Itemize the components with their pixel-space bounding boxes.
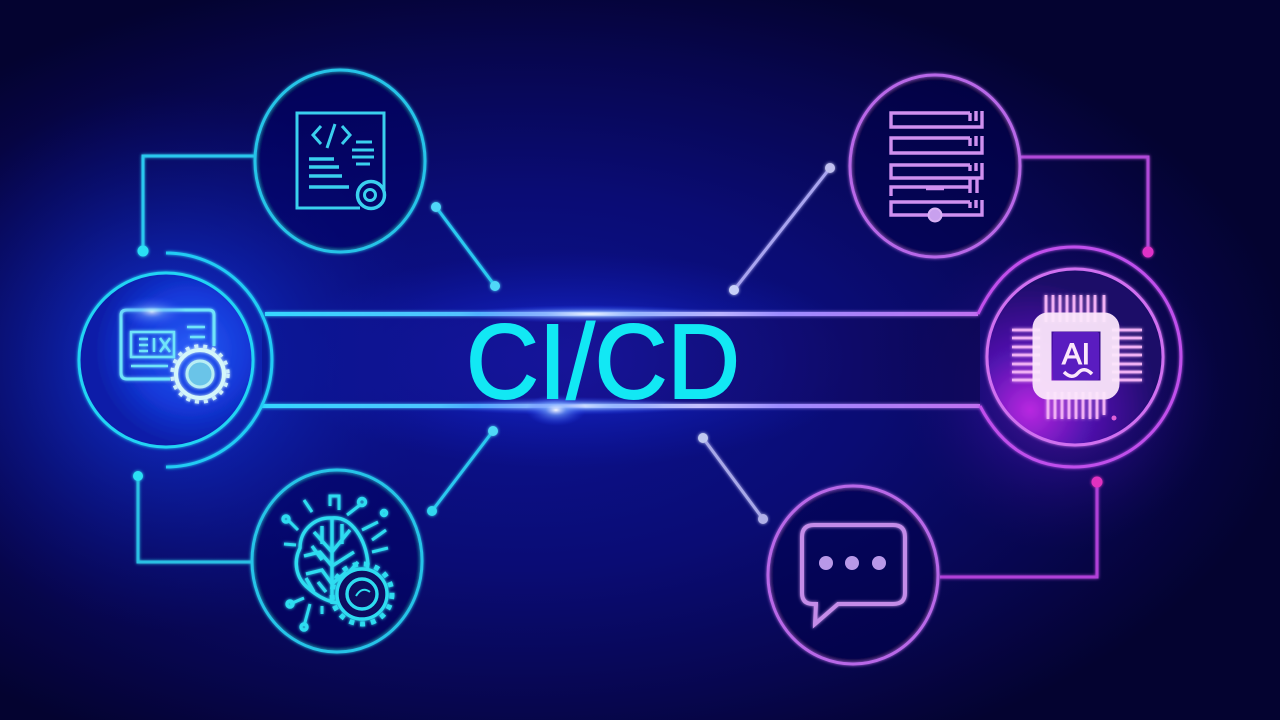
connector: top-left diagonal [431,202,500,291]
central band [262,305,980,426]
connector: top-right to right hub [1021,157,1154,258]
title: CI/CD [466,303,740,421]
outer arc: left hub [166,253,272,467]
chip label: AI [1062,338,1090,371]
panel: server list [850,75,1020,257]
panel: right hub [978,247,1181,467]
icon: server stack [891,111,982,222]
panel: chat [768,486,938,664]
outer ring: right hub [978,247,1181,467]
band line: top [265,312,978,316]
icon: dashboard card with gear [121,310,228,402]
panel: AI brain [252,470,422,652]
connector: bottom-right to right hub [940,476,1102,577]
icon: brain with gear [283,496,392,630]
chip body [1042,322,1110,390]
panel: left hub [79,253,272,467]
connector: top-left to left hub [138,156,255,256]
band line: bottom [262,404,980,408]
icon: code document [297,113,384,208]
icon: AI chip [1012,295,1142,420]
connector: top-right diagonal [729,163,835,295]
connector: bottom-left diagonal [427,426,498,516]
connector: bottom-right diagonal [698,433,768,524]
connector: bottom-left to left hub [133,471,252,562]
panel: document [255,70,425,252]
icon: speech bubble [802,525,905,624]
